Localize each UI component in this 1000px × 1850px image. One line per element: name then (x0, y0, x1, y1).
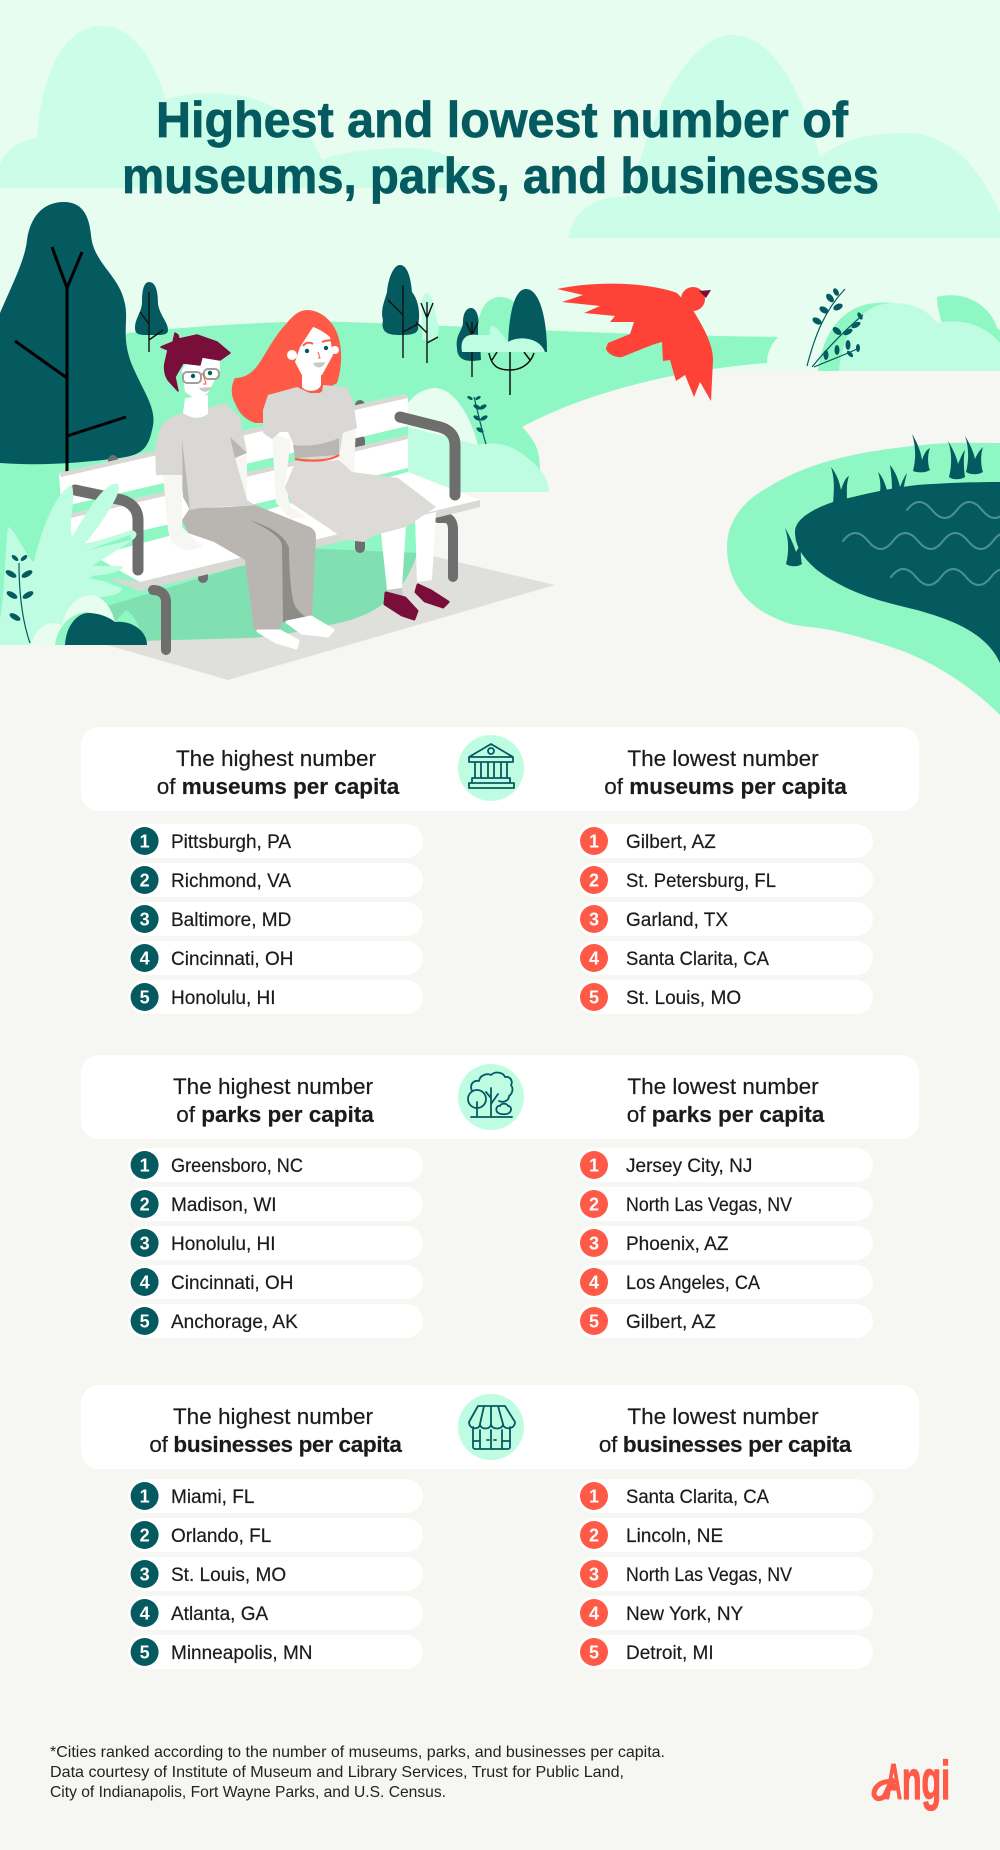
list: highest businesses: 5 (140, 1642, 150, 1662)
list: highest parks: 4 (140, 1272, 150, 1292)
businesses heading bar: of businesses per capita (599, 1432, 852, 1457)
list: highest parks: 5 (140, 1312, 150, 1332)
parks heading bar (81, 1055, 919, 1139)
list: lowest parks: 3 (589, 1234, 599, 1254)
list: lowest parks: 5 (589, 1312, 599, 1332)
list: highest museums: 5 (140, 988, 150, 1008)
list: lowest museums: St. Louis, MO (626, 988, 741, 1009)
green lawn (0, 322, 778, 645)
list: highest parks (128, 1148, 423, 1338)
list: lowest businesses: Santa Clarita, CA (626, 1487, 769, 1508)
list: lowest museums: 2 (589, 870, 599, 890)
list: highest businesses: 2 (140, 1526, 150, 1546)
list: highest businesses: Atlanta, GA (171, 1604, 268, 1625)
title: museums, parks, and businesses (122, 148, 879, 204)
logo: Angi: A (885, 1754, 902, 1810)
list: highest parks: 1 (140, 1156, 150, 1176)
icon: storefront (458, 1394, 524, 1460)
list: lowest museums: 3 (589, 910, 599, 930)
list: highest businesses (128, 1479, 423, 1669)
list: lowest parks (577, 1148, 873, 1338)
businesses heading bar: The highest number (173, 1404, 374, 1429)
list: highest parks: Greensboro, NC (171, 1156, 303, 1177)
list: lowest businesses: Lincoln, NE (626, 1526, 723, 1547)
list: highest museums: Richmond, VA (171, 871, 291, 892)
bird (557, 284, 713, 401)
museums heading bar: of museums per capita (157, 774, 400, 799)
park bench (59, 394, 480, 650)
panel: parks (81, 1055, 919, 1338)
title: Highest and lowest number of (156, 92, 848, 148)
list: lowest businesses (577, 1479, 873, 1669)
list: lowest parks: Phoenix, AZ (626, 1234, 729, 1255)
list: highest museums: 1 (140, 832, 150, 852)
list: highest museums: Pittsburgh, PA (171, 832, 291, 853)
museums heading bar: of museums per capita (604, 774, 847, 799)
list: highest museums: Cincinnati, OH (171, 949, 294, 970)
footnote: Data courtesy of Institute of Museum and Library Services, Trust for Public Land, (50, 1764, 624, 1781)
pond grass (785, 434, 983, 566)
bush behind bench (408, 388, 549, 492)
list: highest parks: 3 (140, 1234, 150, 1254)
list: lowest businesses: 3 (589, 1564, 599, 1584)
list: highest parks: Honolulu, HI (171, 1234, 276, 1255)
list: highest businesses: 3 (140, 1564, 150, 1584)
bench shadow (107, 548, 555, 680)
list: lowest businesses: 2 (589, 1526, 599, 1546)
list: highest museums: 2 (140, 870, 150, 890)
list: lowest museums (577, 824, 873, 1014)
list: lowest businesses: North Las Vegas, NV (626, 1565, 792, 1586)
list: lowest parks: 4 (589, 1272, 599, 1292)
list: lowest businesses: 1 (589, 1486, 599, 1506)
woman (232, 310, 448, 619)
list: lowest parks: 1 (589, 1156, 599, 1176)
right bushes (818, 295, 1000, 371)
museums heading bar (81, 727, 919, 811)
list: highest museums (128, 824, 423, 1014)
list: lowest parks: Jersey City, NJ (626, 1156, 752, 1177)
list: lowest parks: 2 (589, 1194, 599, 1214)
logo: Angi: ngi (902, 1749, 950, 1811)
list: highest parks: Madison, WI (171, 1195, 277, 1216)
list: lowest museums: Santa Clarita, CA (626, 949, 769, 970)
list: lowest businesses: 5 (589, 1642, 599, 1662)
list: lowest parks: Los Angeles, CA (626, 1273, 760, 1294)
list: highest businesses: Orlando, FL (171, 1526, 271, 1547)
list: lowest museums: 4 (589, 948, 599, 968)
list: highest businesses: 1 (140, 1486, 150, 1506)
list: lowest businesses: Detroit, MI (626, 1643, 714, 1664)
distant trees (135, 265, 547, 395)
right plant stems (807, 287, 864, 367)
background hills (0, 26, 1000, 238)
businesses heading bar: of businesses per capita (149, 1432, 402, 1457)
logo: Angi (874, 1749, 950, 1811)
foreground plant (0, 484, 147, 645)
list: highest parks: Cincinnati, OH (171, 1273, 294, 1294)
panel: museums (81, 727, 919, 1014)
panel: businesses (81, 1385, 919, 1669)
pond (727, 434, 1000, 715)
parks heading bar: The highest number (173, 1074, 374, 1099)
list: lowest museums: St. Petersburg, FL (626, 871, 776, 892)
list: highest businesses: Minneapolis, MN (171, 1643, 312, 1664)
list: highest businesses: St. Louis, MO (171, 1565, 286, 1586)
list: lowest parks: North Las Vegas, NV (626, 1195, 792, 1216)
businesses heading bar (81, 1385, 919, 1469)
list: highest businesses: Miami, FL (171, 1487, 254, 1508)
list: highest museums: Baltimore, MD (171, 910, 291, 931)
list: highest parks: 2 (140, 1194, 150, 1214)
parks heading bar: The lowest number (627, 1074, 819, 1099)
list: highest museums: 3 (140, 910, 150, 930)
footnote (50, 1744, 665, 1801)
list: highest parks: Anchorage, AK (171, 1312, 298, 1333)
parks heading bar: of parks per capita (627, 1102, 825, 1127)
list: lowest parks: Gilbert, AZ (626, 1312, 716, 1333)
businesses heading bar: The lowest number (627, 1404, 819, 1429)
list: lowest museums: Gilbert, AZ (626, 832, 716, 853)
parks heading bar: of parks per capita (176, 1102, 374, 1127)
man (155, 333, 333, 648)
list: highest businesses: 4 (140, 1604, 150, 1624)
list: lowest museums: 5 (589, 988, 599, 1008)
large foreground tree (0, 202, 154, 473)
museums heading bar: The highest number (176, 746, 377, 771)
park illustration (0, 202, 1000, 715)
list: lowest businesses: 4 (589, 1604, 599, 1624)
icon: trees (458, 1064, 524, 1130)
icon: museum (458, 735, 524, 801)
footnote: *Cities ranked according to the number of museums, parks, and businesses per capita. (50, 1744, 665, 1761)
list: lowest businesses: New York, NY (626, 1604, 744, 1625)
list: lowest museums: 1 (589, 832, 599, 852)
list: highest museums: 4 (140, 948, 150, 968)
museums heading bar: The lowest number (627, 746, 819, 771)
list: lowest museums: Garland, TX (626, 910, 728, 931)
list: highest museums: Honolulu, HI (171, 988, 276, 1009)
title (122, 92, 879, 204)
footnote: City of Indianapolis, Fort Wayne Parks, and U.S. Census. (50, 1784, 446, 1801)
